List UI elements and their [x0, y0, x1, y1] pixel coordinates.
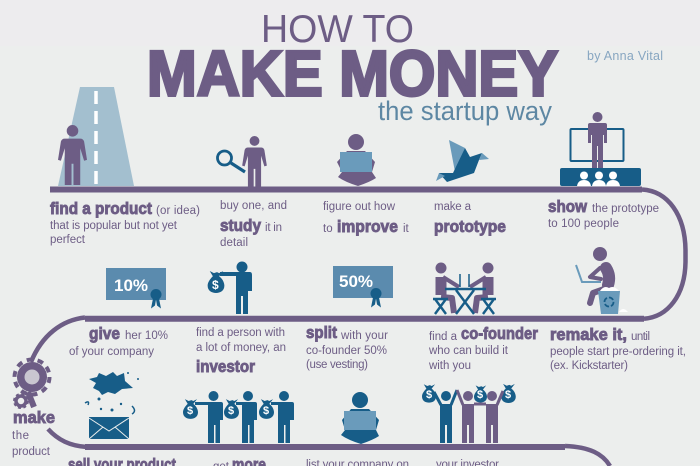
text: give — [69, 324, 168, 358]
text: find a product: find a product — [50, 199, 152, 218]
title — [147, 8, 558, 126]
text: prototype: prototype — [434, 217, 506, 236]
icon: person — [58, 125, 87, 185]
text: make the product — [12, 408, 55, 458]
icon: road — [58, 87, 134, 186]
text: split — [306, 323, 388, 371]
title: MAKE MONEY — [147, 38, 558, 110]
step: study — [218, 136, 287, 249]
icon: exploding envelope — [85, 372, 139, 439]
icon: gears — [14, 360, 50, 408]
text: investor — [196, 327, 286, 376]
title: HOW TO — [261, 8, 414, 51]
icon: person with laptop — [337, 134, 376, 186]
icon: three investors with money bags — [183, 391, 294, 443]
text: improve: it — [403, 223, 410, 235]
icon: three investors with money bags: $ — [263, 405, 269, 417]
text: study: study — [220, 216, 261, 235]
text: find a product — [50, 199, 200, 246]
text: study: detail — [220, 237, 248, 249]
step: split — [306, 266, 393, 371]
text: improve — [323, 201, 410, 236]
icon: person with laptop — [341, 392, 379, 444]
text: split: split — [306, 323, 337, 342]
text: split: (use vesting) — [306, 359, 368, 371]
icon: three people raising money bags: $ — [505, 389, 511, 401]
icon: three investors with money bags: $ — [187, 405, 193, 417]
text: improve: improve — [337, 217, 398, 236]
step: get more investors — [183, 391, 294, 466]
text: show: to 100 people — [548, 218, 619, 230]
icon: two founders at table — [433, 262, 496, 314]
text: give: her 10% — [125, 330, 168, 342]
icon: origami bird — [436, 140, 489, 182]
text: show: the prototype — [592, 203, 659, 215]
icon: magnifier — [218, 151, 245, 172]
icon: three investors with money bags: $ — [228, 405, 234, 417]
step: sell your product — [68, 372, 176, 466]
step: remake — [550, 247, 686, 372]
text: split: with your — [340, 330, 388, 342]
text: investor: find a person with — [196, 327, 285, 339]
header background — [0, 0, 700, 46]
text: make the product: the — [12, 430, 29, 442]
text: co-founder: co-founder — [461, 324, 538, 343]
text: find a product: that is popular but not yet — [50, 220, 178, 232]
step: your investor — [422, 384, 516, 466]
icon: person on recycling bin — [576, 247, 628, 314]
text: get more — [213, 455, 266, 466]
text: investor: a lot of money, an — [196, 342, 286, 354]
text: split: co-founder 50% — [306, 345, 387, 357]
step: find a product — [50, 87, 200, 246]
text: study — [220, 200, 287, 249]
icon: three people raising money bags: $ — [426, 389, 432, 401]
text: co-founder: who can build it — [428, 345, 509, 357]
text: remake: (ex. Kickstarter) — [550, 360, 628, 372]
timeline path — [31, 190, 686, 466]
icon: 50% certificate: 50% — [339, 272, 373, 291]
icon: three people raising money bags — [422, 384, 516, 443]
text: make the product: product — [12, 446, 51, 458]
step: make the product — [12, 360, 55, 458]
step: prototype — [434, 140, 506, 236]
text: co-founder: find a — [429, 331, 458, 343]
text: improve: to — [323, 223, 333, 235]
title: the startup way — [378, 96, 552, 126]
text: show — [548, 197, 659, 230]
text: improve: figure out how — [323, 201, 396, 213]
step: investor — [196, 262, 286, 376]
text: co-founder — [428, 324, 538, 372]
icon: three people raising money bags: $ — [477, 389, 483, 401]
text: remake: remake it, — [550, 325, 627, 344]
icon: 10% certificate: 10% — [114, 276, 148, 295]
author credit: by Anna Vital — [587, 49, 663, 63]
text: study: it in — [265, 222, 282, 234]
text: give: of your company — [69, 346, 154, 358]
icon: investor with money bag: $ — [212, 278, 219, 292]
step: show — [548, 112, 659, 230]
text: make the product: make — [13, 408, 55, 427]
step: list your company — [306, 392, 409, 466]
text: give: give — [89, 324, 120, 343]
text: remake: people start pre-ordering it, — [550, 346, 686, 358]
step: improve — [323, 134, 410, 236]
text: remake — [550, 325, 686, 372]
text: co-founder: with you — [428, 360, 471, 372]
text: find a product: (or idea) — [156, 205, 200, 217]
icon: presenter on stage — [560, 112, 641, 186]
text: find a product: perfect — [50, 234, 86, 246]
text: prototype — [434, 201, 506, 236]
text: show: show — [548, 197, 588, 216]
step: co-founder — [428, 262, 538, 372]
icon: person — [242, 136, 267, 187]
text: prototype: make a — [434, 201, 472, 213]
text: investor: investor — [196, 357, 255, 376]
text: remake: until — [631, 331, 650, 343]
text: study: buy one, and — [220, 200, 287, 212]
step: give — [69, 268, 168, 358]
